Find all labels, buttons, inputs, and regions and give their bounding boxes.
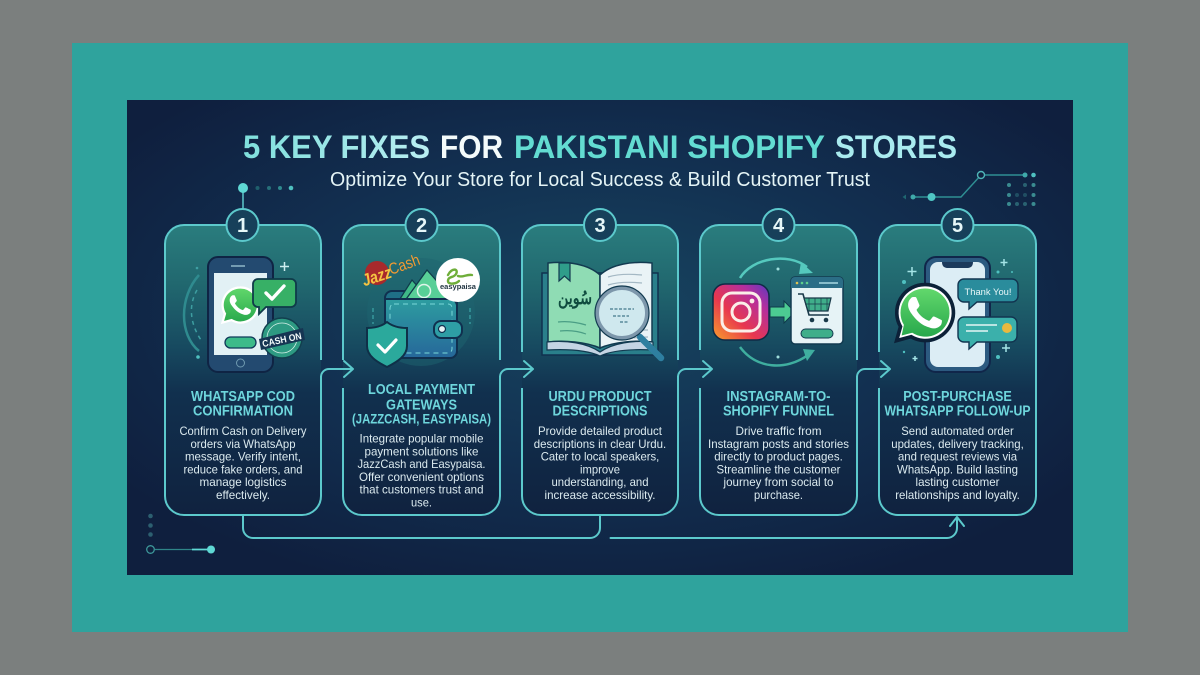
card 2 body: use. [411,495,432,509]
card 3 [522,209,678,515]
card 4 number: 4 [773,215,785,237]
card 5 panel [879,225,1036,515]
card 4 body: Drive traffic from [736,424,822,438]
card 5 number [942,209,974,241]
card 3 body: Provide detailed product [538,424,663,438]
icon: wallet with JazzCash, Easypaisa and shield: easypaisa [440,282,477,291]
connector: card 1 to card 3 [243,516,600,538]
arrow: card 2 to 3 [500,361,533,378]
card 4 heading [723,389,834,420]
card 5 body: and request reviews via [898,450,1017,464]
title: STORES [835,129,957,165]
title: FOR [440,129,503,165]
decoration: top left nodes [238,183,293,210]
card 5 body [891,424,1024,502]
card 5 body: WhatsApp. Build lasting [897,462,1018,476]
card 2 heading: (JAZZCASH, EASYPAISA) [352,412,491,427]
decoration: top right circuit [902,172,1036,206]
navy panel [127,100,1073,575]
card 5 body: updates, delivery tracking, [891,437,1024,451]
icon: wallet with JazzCash, Easypaisa and shield: Jazz [360,263,394,290]
arrow: card 3 to 4 [678,361,712,378]
card 2 number: 2 [416,215,427,237]
card 5 heading: POST-PURCHASE [903,389,1012,405]
card 3 body: improve [580,462,620,476]
subtitle: Optimize Your Store for Local Success & Build Customer Trust [330,169,870,191]
card 4 body: directly to product pages. [714,450,843,464]
card 4 body: Streamline the customer [716,462,841,476]
icon: phone with WhatsApp, check bubble and cash on delivery stamp: CASH ON [261,331,303,350]
card 2 body: payment solutions like [364,444,479,458]
icon: phone with WhatsApp and chat bubbles: Thank You! [964,287,1012,298]
card 1 number: 1 [237,215,248,237]
title [243,129,957,165]
card 3 heading: URDU PRODUCT [548,389,652,405]
card 1 body: manage logistics [200,475,287,489]
card 5 heading [884,389,1031,420]
icon: phone with WhatsApp, check bubble and cash on delivery stamp [184,257,305,372]
card 4 panel [700,225,857,515]
card 1 number [226,209,258,241]
icon: wallet with JazzCash, Easypaisa and shield [360,252,480,367]
card 2 heading: GATEWAYS [386,398,457,414]
card 2 body: that customers trust and [360,482,484,496]
card 3 panel [522,225,678,515]
card 5 body: Send automated order [901,424,1014,438]
card 1 body: Confirm Cash on Delivery [180,424,307,438]
arrow: card 1 to 2 [321,361,353,378]
decoration: bottom left nodes [147,514,215,554]
card 1 body: orders via WhatsApp [190,437,296,451]
card 4 body [708,424,849,502]
card 2 heading [352,382,491,427]
card 4 body: purchase. [754,488,803,502]
arrow: bottom connector into card 5 [610,517,964,538]
card 5 heading: WHATSAPP FOLLOW-UP [884,404,1031,420]
icon: Instagram to shopping cart page [713,259,843,365]
card 2 panel [343,225,500,515]
card 1 body: effectively. [216,488,270,502]
card 3 number: 3 [594,215,606,237]
card 1 heading: CONFIRMATION [193,404,293,420]
card 1 body: reduce fake orders, and [184,462,302,476]
icon: wallet with JazzCash, Easypaisa and shield: Cash [387,252,422,279]
card 3 body: Cater to local speakers, [541,450,659,464]
card 3 body: understanding, and [552,475,648,489]
card 1 heading [191,389,295,420]
card 4 number [762,209,794,241]
card 5 body: relationships and loyalty. [895,488,1020,502]
card 4 body: Instagram posts and stories [708,437,849,451]
card 1 panel [165,225,321,515]
card 2 body [358,432,486,509]
card 2 heading: LOCAL PAYMENT [368,382,475,398]
card 5 [879,209,1036,515]
card 1 [165,209,321,515]
card 5 body: lasting customer [916,475,1000,489]
card 2 body: Integrate popular mobile [360,432,484,446]
card 2 body: JazzCash and Easypaisa. [358,457,486,471]
arrow: card 4 to 5 [857,361,890,378]
card 4 heading: SHOPIFY FUNNEL [723,404,834,420]
card 1 heading: WHATSAPP COD [191,389,295,405]
teal frame [72,43,1128,632]
card 1 body: message. Verify intent, [185,450,301,464]
card 4 [700,209,857,515]
card 3 heading [548,389,652,420]
card 3 heading: DESCRIPTIONS [552,404,648,420]
title: PAKISTANI SHOPIFY [514,129,825,165]
title: 5 KEY FIXES [243,129,430,165]
card 4 body: journey from social to [723,475,834,489]
card 3 number [584,209,616,241]
icon: open book with Urdu text and magnifier: سُوین [558,288,592,309]
card 2 [343,209,500,515]
card 3 body: descriptions in clear Urdu. [534,437,666,451]
icon: phone with WhatsApp and chat bubbles [897,257,1018,372]
card 5 number: 5 [952,215,963,237]
icon: open book with Urdu text and magnifier [542,262,661,358]
card 4 heading: INSTAGRAM-TO- [726,389,831,405]
card 3 body [534,424,666,502]
card 1 body [180,424,307,502]
card 2 body: Offer convenient options [359,470,484,484]
card 3 body: increase accessibility. [544,488,656,502]
card 2 number [406,209,438,241]
